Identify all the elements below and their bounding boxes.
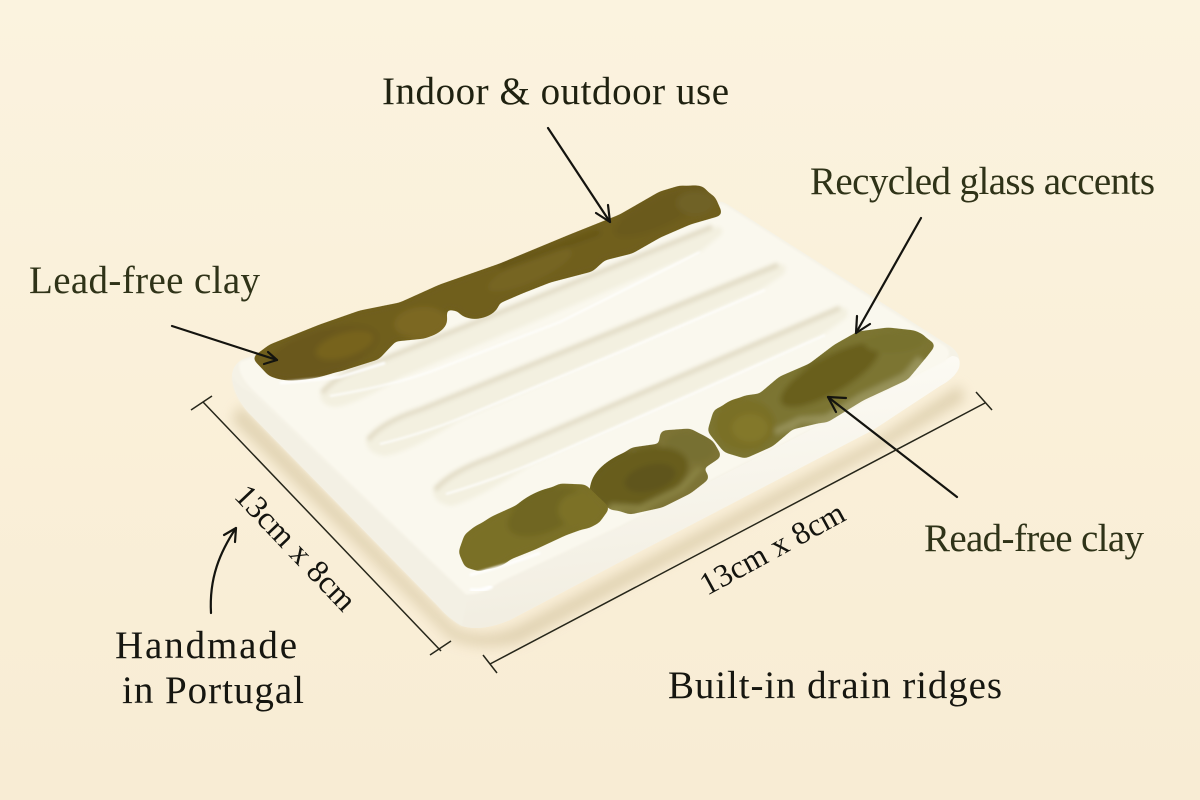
label: lead-free clay: Lead-free clay	[29, 259, 260, 302]
dimension line: right edge	[483, 392, 992, 673]
plate body	[232, 202, 960, 628]
glass accent: lower strip left	[456, 477, 608, 575]
soap dish photo	[232, 177, 965, 646]
label: built-in drain ridges: Built-in drain ridges	[668, 664, 1002, 707]
label: recycled glass accents: Recycled glass accents	[810, 160, 1155, 203]
curved arrow: handmade in Portugal	[211, 528, 236, 613]
ridge 3	[433, 308, 848, 506]
label: read-free clay: Read-free clay	[924, 517, 1144, 560]
label: handmade in Portugal: in Portugal	[122, 669, 304, 712]
dimension line: left edge	[191, 396, 451, 655]
label: handmade in Portugal: Handmade	[115, 624, 297, 667]
arrow: recycled glass accents	[856, 218, 921, 333]
drain ridges	[320, 227, 848, 506]
wet highlights around glass	[280, 363, 540, 575]
corner highlight	[470, 586, 492, 590]
plate top face	[239, 204, 949, 594]
arrow: lead-free clay	[172, 326, 277, 364]
label: handmade in Portugal	[115, 624, 304, 712]
glass accent: lower strip middle	[584, 429, 720, 518]
dimension label: right edge: 13cm x 8cm	[693, 494, 851, 602]
plate front side	[440, 356, 960, 628]
heading label: indoor and outdoor use: Indoor & outdoor use	[382, 70, 729, 113]
ridge 1	[320, 227, 722, 407]
glass accent: top strip	[254, 177, 721, 390]
ridge 2	[366, 264, 786, 456]
plate shadow	[232, 385, 965, 646]
dimension label: left edge: 13cm x 8cm	[228, 477, 364, 618]
glass accent: right strip	[709, 329, 934, 457]
plate left side	[232, 374, 467, 626]
arrow: read-free clay	[828, 397, 957, 497]
arrow: indoor and outdoor use	[548, 128, 610, 222]
